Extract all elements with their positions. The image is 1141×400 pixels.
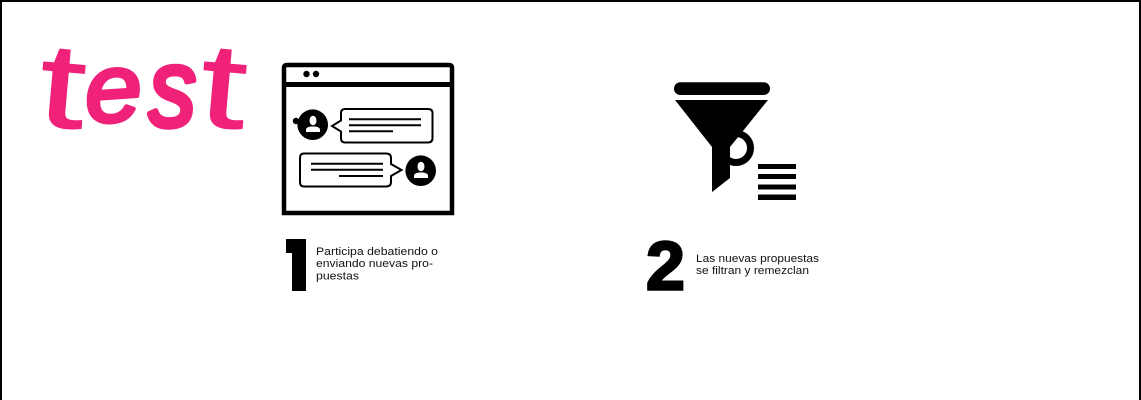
header divider — [282, 82, 454, 87]
title: test: e — [81, 32, 145, 143]
funnel rim — [674, 82, 770, 95]
step 2 number: 2 — [646, 227, 685, 304]
window frame — [284, 65, 452, 213]
step 2 text: Las nuevas propuestas — [696, 253, 820, 265]
step 1 text: Participa debatiendo o — [316, 246, 438, 258]
avatar right — [405, 155, 436, 186]
icon: funnel with list — [674, 82, 796, 200]
list lines — [758, 164, 796, 200]
title: test: t — [195, 17, 252, 155]
step 1 text: puestas — [316, 270, 360, 282]
speech bubble bottom — [300, 154, 402, 186]
avatar left — [293, 109, 328, 140]
step 2 text: se filtran y remezclan — [696, 265, 809, 277]
title: test — [34, 17, 252, 155]
funnel body — [675, 100, 768, 192]
step 1 text: enviando nuevas pro- — [316, 258, 433, 270]
window dots — [303, 71, 319, 77]
title: test: t — [34, 17, 91, 155]
speech bubble top — [332, 109, 432, 142]
funnel ring handle — [722, 134, 750, 162]
step 1 text — [316, 246, 438, 282]
step 2 text — [696, 253, 820, 277]
icon: browser window with chat — [282, 65, 454, 213]
step 1 number: 1 — [277, 224, 318, 307]
title: test: s — [149, 26, 196, 150]
